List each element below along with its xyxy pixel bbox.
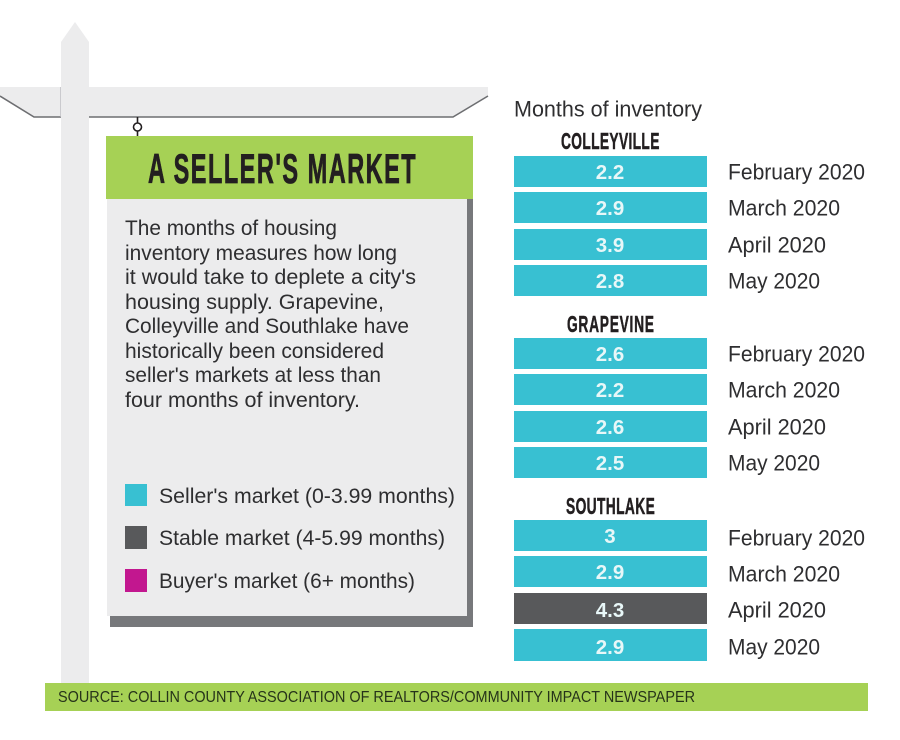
bar: April: 3.9: [596, 234, 624, 257]
bar: April: April 2020: [728, 598, 826, 623]
bar: March: March 2020: [728, 378, 840, 403]
text block: description: housing supply. Grapevine,: [125, 291, 384, 314]
text block: description: inventory measures how long: [125, 242, 397, 265]
bar: February: February 2020: [728, 160, 865, 185]
bar: April: April 2020: [728, 415, 826, 440]
legend: [125, 484, 455, 593]
bar: May: 2.5: [596, 452, 624, 475]
legend: seller's market: Seller's market (0-3.99 months): [159, 485, 455, 508]
bar: March: [514, 556, 840, 587]
bar: February: [514, 156, 865, 187]
bar: February: 2.2: [596, 161, 624, 184]
bar: February: 2.6: [596, 343, 624, 366]
legend: buyer's market: Buyer's market (6+ months): [159, 570, 415, 593]
text block: description: historically been considered: [125, 340, 384, 363]
bar: March: 2.9: [596, 561, 624, 584]
text block: description: [125, 217, 416, 412]
bar: May: [514, 629, 820, 661]
signpost: [0, 22, 488, 683]
text block: description: Colleyville and Southlake have: [125, 315, 409, 338]
city heading: SOUTHLAKE: [566, 495, 655, 520]
bar: March: March 2020: [728, 196, 840, 221]
legend: stable market: Stable market (4-5.99 months): [159, 527, 445, 550]
bar: April: [514, 593, 826, 624]
bar: March: [514, 374, 840, 405]
bar: May: 2.9: [596, 636, 624, 659]
city heading: GRAPEVINE: [567, 313, 654, 338]
bar: February: [514, 520, 865, 551]
bar: April: April 2020: [728, 233, 826, 258]
bar: February: February 2020: [728, 526, 865, 551]
panel: Colleyville: [514, 130, 865, 296]
bar: March: 2.2: [596, 379, 624, 402]
source bar: SOURCE: COLLIN COUNTY ASSOCIATION OF REALTORS/COMMUNITY IMPACT NEWSPAPER: [58, 689, 695, 706]
panel: Southlake: [514, 495, 865, 661]
bar: April: 4.3: [596, 599, 624, 622]
title: A SELLER'S MARKET: [148, 146, 416, 193]
sign shadow: [110, 199, 473, 627]
text block: description: it would take to deplete a city's: [125, 266, 416, 289]
panel: Grapevine: [514, 313, 865, 478]
sign header: [106, 136, 473, 199]
bar: May: 2.8: [596, 270, 624, 293]
bar: May: [514, 265, 820, 296]
city heading: COLLEYVILLE: [561, 130, 659, 155]
bar: May: May 2020: [728, 269, 820, 294]
bar: May: May 2020: [728, 635, 820, 660]
text block: description: four months of inventory.: [125, 389, 360, 412]
bar: April: 2.6: [596, 416, 624, 439]
chart heading: Months of inventory: [514, 97, 702, 122]
bar: February: February 2020: [728, 342, 865, 367]
icon: sign hook: [134, 117, 142, 136]
bar: February: 3: [604, 525, 616, 548]
bar: April: [514, 411, 826, 442]
sign body: [107, 199, 467, 616]
panel: sign: [106, 136, 473, 627]
bar: March: [514, 192, 840, 223]
bar: May: [514, 447, 820, 478]
bar: May: May 2020: [728, 451, 820, 476]
bar: March: 2.9: [596, 197, 624, 220]
bar: March: March 2020: [728, 562, 840, 587]
bar: February: [514, 338, 865, 369]
source bar: [45, 683, 868, 711]
text block: description: seller's markets at less than: [125, 364, 381, 387]
bar: April: [514, 229, 826, 260]
text block: description: The months of housing: [125, 217, 337, 240]
